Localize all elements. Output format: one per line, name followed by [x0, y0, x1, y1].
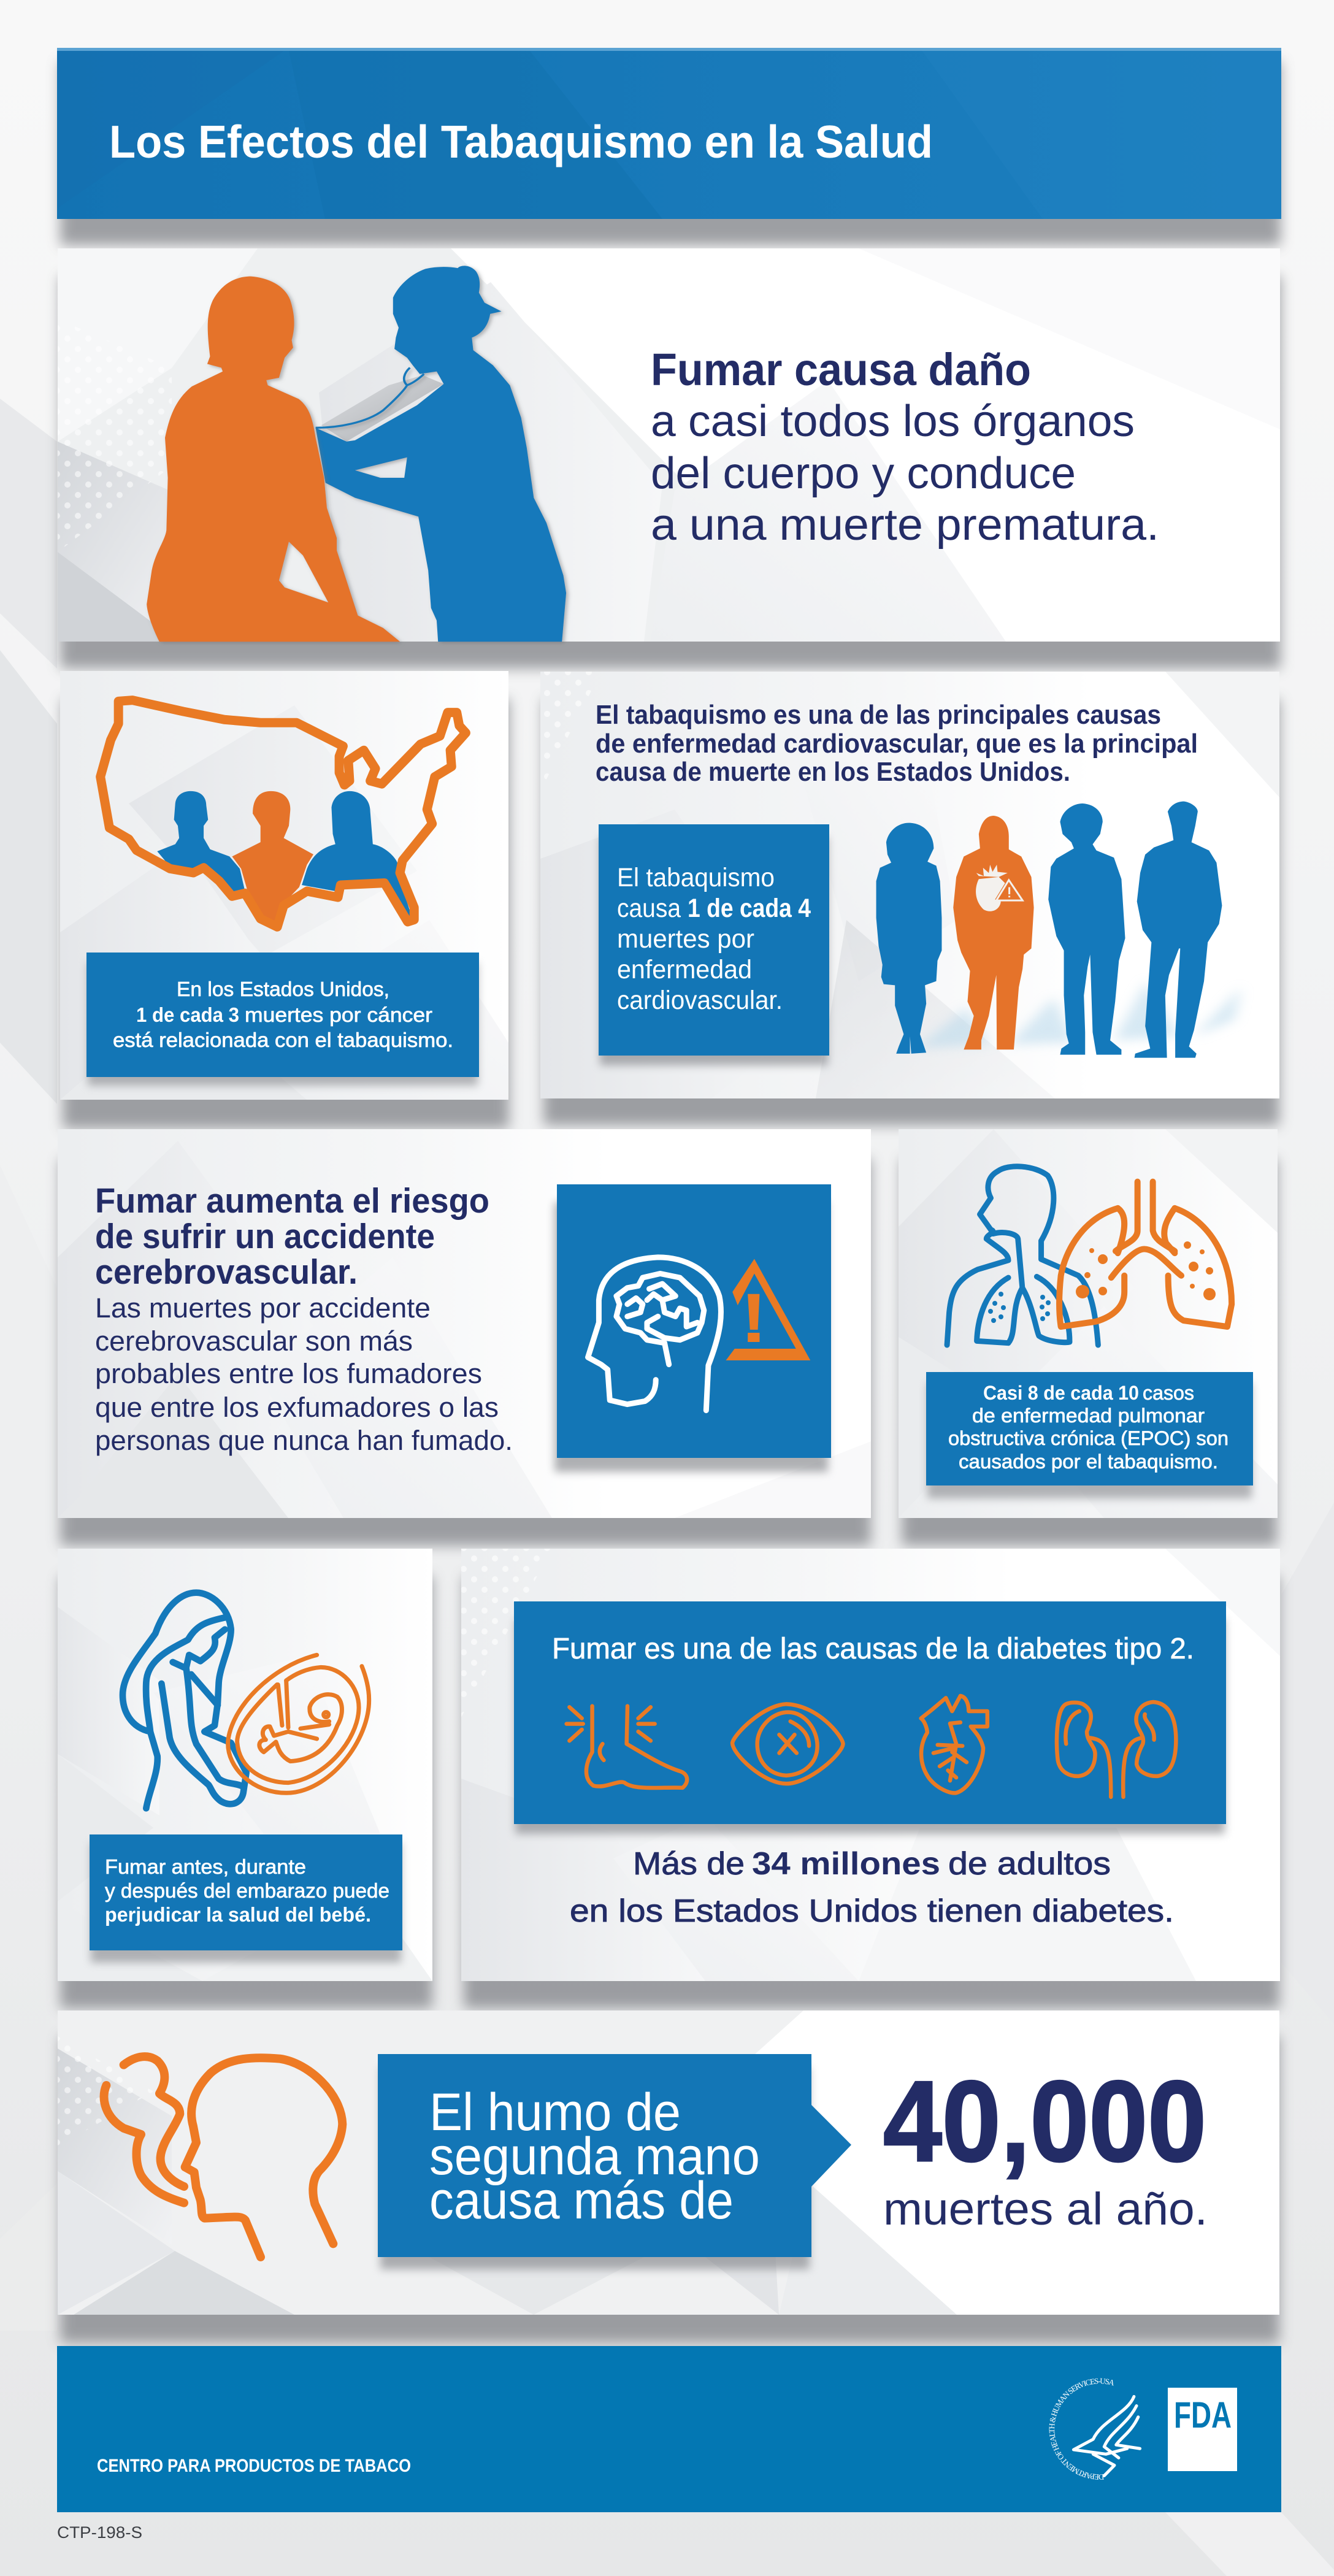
callout: 1 in 4 cardiovascular deaths: [599, 824, 829, 1056]
person: woman in blue: [876, 823, 941, 1054]
icon: blue lung particles: [988, 1292, 1051, 1323]
callout: 8 in 10 COPD cases: Casi 8 de cada 10: [983, 1382, 1139, 1404]
icon: orange damaged lungs: [1059, 1182, 1232, 1327]
patient silhouette: [147, 277, 400, 642]
body text: probables entre los fumadores: [95, 1358, 482, 1389]
arrow callout: secondhand smoke: causa más de: [429, 2171, 734, 2230]
panel: secondhand smoke: [58, 2011, 1279, 2315]
heading text: de sufrir un accidente: [95, 1217, 435, 1256]
panel: COPD: [899, 1129, 1278, 1518]
panel: cardiovascular disease: [540, 672, 1279, 1098]
panel: cancer deaths map: [60, 671, 508, 1100]
text: 34 million adults: Más de: [633, 1846, 745, 1882]
callout: 1 in 3 cancer deaths: muertes por cáncer: [245, 1003, 432, 1026]
icon: pregnant woman outline: [123, 1593, 247, 1808]
illustration: patient and doctor silhouettes: [147, 266, 566, 642]
callout: 1 in 4 cardiovascular deaths: muertes por: [617, 924, 754, 954]
callout: pregnancy text: [90, 1834, 402, 1950]
callout: 8 in 10 COPD cases: obstructiva crónica (EPOC) son: [948, 1427, 1229, 1449]
footer band: [57, 2346, 1281, 2512]
box: diabetes complications: Fumar es una de las causas de la diabetes tipo 2.: [552, 1633, 1194, 1665]
panel: smoking harms organs: [58, 248, 1280, 642]
statistic: 40,000 deaths: [883, 2057, 1208, 2234]
logo: FDA: FDA: [1174, 2394, 1232, 2436]
callout: pregnancy text: perjudicar la salud del bebé.: [105, 1903, 371, 1926]
icon: blue airway and lungs: [947, 1167, 1098, 1345]
callout: 1 in 4 cardiovascular deaths: enfermedad: [617, 955, 752, 984]
icon: kidneys: [1057, 1702, 1176, 1797]
person: tall blue man: [1135, 802, 1222, 1058]
panel: pregnancy: [58, 1549, 432, 1981]
heading text: [95, 1181, 489, 1292]
callout: pregnancy text: Fumar antes, durante: [105, 1855, 306, 1878]
callout: 8 in 10 COPD cases: de enfermedad pulmonar: [972, 1405, 1205, 1427]
callout: 8 in 10 COPD cases: casos: [1143, 1382, 1194, 1404]
heading text: [651, 344, 1159, 550]
text: 34 million adults: de adultos: [948, 1846, 1111, 1882]
callout: 8 in 10 COPD cases: [926, 1372, 1253, 1485]
heading text: [596, 700, 1198, 787]
heading text: El tabaquismo es una de las principales causas: [596, 700, 1161, 730]
heading text: de enfermedad cardiovascular, que es la principal: [596, 729, 1198, 759]
arrow callout: secondhand smoke: segunda mano: [429, 2127, 760, 2186]
text: 34 million adults: [570, 1846, 1174, 1929]
body text: Las muertes por accidente: [95, 1292, 431, 1324]
arrow callout: secondhand smoke: El humo de: [429, 2083, 681, 2142]
panel: stroke risk: [58, 1129, 871, 1518]
doctor silhouette: [316, 266, 566, 642]
heading text: Fumar causa daño: [651, 344, 1031, 395]
icon: eye: [732, 1704, 843, 1784]
logo: FDA: [1168, 2388, 1237, 2471]
heading text: a casi todos los órganos: [651, 397, 1135, 446]
icon: warning triangle: [726, 1259, 810, 1360]
person: blue man: [1048, 803, 1125, 1055]
icon: pregnant woman and fetus: [123, 1593, 369, 1808]
illustration: four people silhouettes: [876, 802, 1241, 1058]
icon: head with brain: [588, 1257, 721, 1411]
heading text: Fumar aumenta el riesgo: [95, 1181, 489, 1221]
icon: fetus in womb: [228, 1655, 369, 1793]
heading text: a una muerte prematura.: [651, 500, 1159, 550]
body text: [95, 1292, 513, 1456]
icon: heart: [921, 1696, 987, 1793]
callout: 8 in 10 COPD cases: causados por el tabaquismo.: [959, 1451, 1218, 1473]
heading text: del cuerpo y conduce: [651, 449, 1076, 498]
heading text: cerebrovascular.: [95, 1252, 358, 1292]
callout: 1 in 3 cancer deaths: En los Estados Unidos,: [177, 978, 389, 1000]
callout: 1 in 4 cardiovascular deaths: cardiovascular.: [617, 986, 783, 1015]
callout: 1 in 4 cardiovascular deaths: causa: [617, 894, 681, 923]
icon: USA map with three people: [101, 700, 466, 927]
arrow callout: secondhand smoke: [378, 2054, 851, 2257]
body text: que entre los exfumadores o las: [95, 1392, 499, 1423]
icon panel: brain and warning: [557, 1184, 831, 1458]
person: orange with heart warning: [953, 816, 1034, 1049]
callout: 1 in 4 cardiovascular deaths: 1 de cada 4: [688, 894, 811, 923]
callout: 1 in 3 cancer deaths: 1 de cada 3: [136, 1003, 239, 1026]
document code: CTP-198-S: [57, 2523, 142, 2542]
body text: personas que nunca han fumado.: [95, 1425, 513, 1456]
text: 34 million adults: en los Estados Unidos tienen diabetes.: [570, 1893, 1174, 1929]
icon: foot: [567, 1706, 687, 1788]
footer text: CENTRO PARA PRODUCTOS DE TABACO: [97, 2456, 411, 2476]
logo: HHS seal: [1049, 2379, 1142, 2480]
heading text: causa de muerte en los Estados Unidos.: [596, 757, 1070, 787]
statistic: 40,000 deaths: muertes al año.: [883, 2183, 1208, 2234]
title: Los Efectos del Tabaquismo en la Salud: [109, 116, 933, 167]
callout: 1 in 3 cancer deaths: [86, 953, 479, 1077]
panel: diabetes: [461, 1549, 1280, 1981]
callout: 1 in 4 cardiovascular deaths: El tabaquismo: [617, 863, 775, 892]
body text: cerebrovascular son más: [95, 1325, 413, 1357]
box: diabetes complications: [514, 1601, 1226, 1824]
text: 34 million adults: 34 millones: [752, 1846, 940, 1882]
callout: 1 in 3 cancer deaths: está relacionada con el tabaquismo.: [113, 1029, 453, 1051]
header banner: [57, 48, 1281, 219]
callout: pregnancy text: y después del embarazo puede: [105, 1879, 389, 1902]
icon: head exhaling smoke: [104, 2057, 342, 2257]
logo: HHS seal: DEPARTMENT OF HEALTH & HUMAN SERVICES-USA: [1049, 2379, 1114, 2480]
statistic: 40,000 deaths: 40,000: [883, 2057, 1206, 2185]
